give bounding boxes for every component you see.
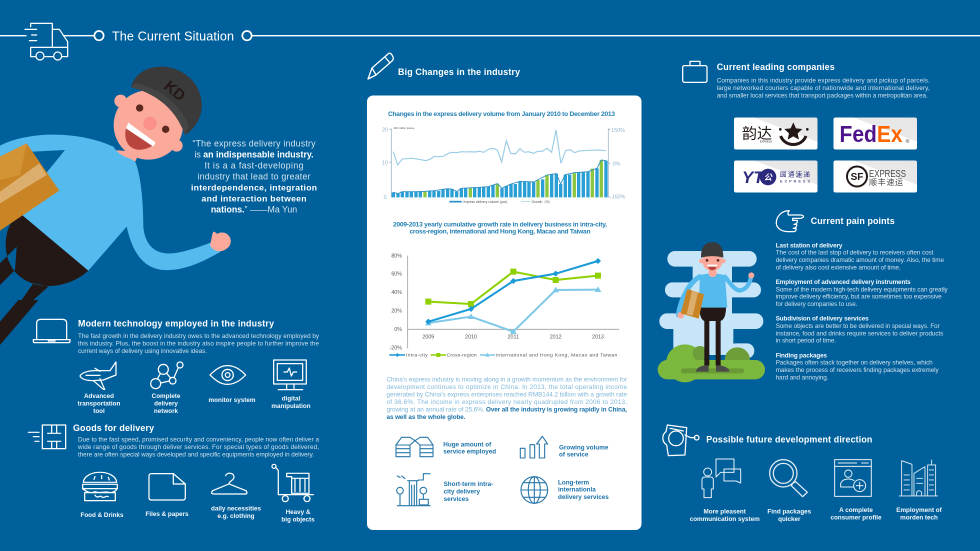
axis labels: 20% [391, 308, 402, 314]
axis labels: 150% [611, 128, 625, 134]
icon: eye [210, 366, 246, 384]
text: modern technology intro: this industry. Plus, the boost in the industry also inspire people to further improve the [78, 340, 319, 348]
icon: burger [83, 472, 117, 501]
label: advanced transportation tool [78, 393, 120, 415]
label: advanced transportation tool: Advanced [84, 393, 114, 400]
text: advanced instruments: Some of the modern high-tech delivery equipments can greatly [776, 286, 949, 293]
label: short-term: Short-term intra- [444, 481, 493, 488]
logo: YTO express: 公 [764, 173, 773, 182]
logo: SF express: SF [851, 172, 863, 183]
axis labels: 60% [391, 272, 402, 278]
label: complete delivery network [152, 393, 181, 415]
chart title [393, 222, 607, 236]
logo: SF express [834, 160, 917, 192]
icon: file [149, 474, 185, 500]
heading: big changes: Big Changes in the industry [398, 67, 520, 77]
label: heavy and big objects [281, 509, 315, 524]
chart title: 2009-2013 yearly cumulative growth rate in delivery business in intra-city, [393, 222, 607, 228]
text: subdivision [776, 316, 943, 345]
legs and trousers [0, 213, 88, 300]
illustration: standing courier [658, 242, 765, 382]
panel: modern technology [33, 318, 320, 415]
hand [210, 232, 231, 251]
chart: yearly cumulative growth rate: 2010 [465, 335, 477, 341]
chart: express delivery volume: express delivery volume (pcs) [463, 200, 507, 204]
axis labels: 0% [613, 162, 621, 168]
panel: future development [663, 425, 943, 523]
text: express industry summary: growing at an annual rate of 25.6%. [386, 406, 485, 413]
parcel [681, 289, 704, 319]
label: digital manipulation [271, 396, 311, 410]
icon: plane [80, 362, 116, 389]
text: finding packages: Packages often stack together on delivery shelves, which [776, 360, 933, 367]
pale blue cloud backdrop [659, 251, 763, 358]
line: international [425, 286, 601, 334]
quote by Ma Yun: is an indispensable industry. [194, 150, 314, 160]
icon: digital monitor [274, 360, 306, 390]
icon: consumer profile window [835, 460, 871, 496]
panel: goods for delivery [28, 423, 319, 524]
label: consumer profile: A complete [839, 507, 873, 514]
text: modern technology intro [78, 333, 320, 355]
text: express industry summary [386, 377, 627, 421]
heading: goods for delivery: Goods for delivery [73, 423, 154, 433]
ground and bushes [666, 344, 704, 382]
cap [131, 67, 202, 135]
hands [748, 272, 754, 278]
label: short-term: city delivery [444, 488, 481, 495]
bars: monthly volume [393, 161, 606, 197]
label: advanced transportation tool: transportation [78, 400, 120, 408]
eyes and cheek [136, 104, 143, 112]
text: advanced instruments: improve delivery efficiency, but are sometimes too expensive [776, 294, 942, 301]
text: companies intro: and smaller local services that transport packages within a metropolitan area. [717, 92, 928, 99]
text: last station: Last station of delivery [776, 242, 843, 249]
panel: white card with charts [367, 96, 642, 530]
heading: the current situation: The Current Situation [112, 30, 234, 44]
text: last station: of delivery also cost extensive amount of time. [776, 264, 901, 271]
label: consumer profile [830, 507, 882, 521]
label: heavy and big objects: big objects [281, 516, 315, 524]
text: companies intro: large networked couriers capable of nationwide and international delivery, [717, 85, 930, 92]
bars: highlighted months [425, 160, 601, 197]
text: goods intro: wide range of goods through deliver services. For special types of goods delivered, [77, 444, 319, 451]
logo: FedEx: FedEx [840, 121, 903, 147]
icon: magnifier [770, 460, 807, 497]
text: last station: delivery companies dramatic amount of money. Also, the time [776, 257, 944, 264]
logo: SF express: EXPRESS [869, 169, 906, 180]
smile [125, 128, 154, 150]
label: growing volume: of service [559, 452, 589, 459]
text: advanced instruments [776, 279, 949, 308]
icon: globe [521, 477, 548, 503]
axes [389, 128, 610, 197]
chart title: Changes in the express delivery volume from January 2010 to December 2013 [388, 111, 615, 118]
label: long-term [558, 479, 609, 501]
label: modern tech: Employment of [896, 507, 943, 514]
text: goods intro: there are often special ways developed and specific equipments employed in delivery. [78, 452, 314, 458]
quote by Ma Yun: industry that lead to greater [198, 172, 311, 182]
chart: express delivery volume: Growth（%） [532, 199, 552, 204]
icon: communication [702, 459, 741, 498]
quote by Ma Yun [191, 138, 317, 214]
text: finding packages: hard and annoying. [776, 375, 829, 382]
legend: international and Hong Kong, Macao and Taiwan [496, 353, 618, 359]
label: consumer profile: consumer profile [830, 514, 882, 521]
legend [389, 353, 618, 359]
parcel [0, 143, 59, 231]
icon: stacked service [396, 437, 433, 457]
axis labels: 100 million pieces [393, 126, 415, 130]
logo: YTO express: 圆通速递 [780, 170, 810, 178]
trousers [699, 307, 726, 321]
neck [111, 150, 138, 169]
text: subdivision: in short period of time. [776, 338, 836, 345]
logo: Yunda express: EXPRESS [760, 140, 772, 144]
legs and shoes [704, 318, 721, 366]
label: daily necessities: daily necessities [211, 506, 262, 512]
chart: yearly cumulative growth rate: 2009 [422, 335, 434, 341]
quote by Ma Yun: interdependence, integration [191, 182, 317, 192]
text: express industry summary: development continues to optimize in China. In 2013, the total operating income [386, 384, 627, 391]
icon: parcel box [28, 425, 66, 449]
text: advanced instruments: Employment of advanced delivery instruments [776, 279, 911, 286]
label: find packages: quicker [778, 516, 801, 523]
text: express industry summary: as well as the whole globe. [386, 414, 466, 421]
icon: hand cart [272, 464, 313, 502]
heading: pain points: Current pain points [811, 216, 895, 226]
illustration: delivery man with parcel [0, 67, 231, 345]
label: heavy and big objects: Heavy & [286, 509, 311, 516]
icon: pencil [368, 53, 393, 79]
label: complete delivery network: Complete [152, 393, 181, 400]
chart: yearly cumulative growth rate [389, 222, 619, 359]
icon: delivery truck with timeline [0, 23, 980, 60]
face [114, 90, 183, 160]
label: communication system: More pleasent [704, 509, 747, 516]
arms and torso [678, 277, 700, 315]
text: goods intro: Due to the fast speed, promised security and conveniency, people now often deliver a [78, 436, 319, 444]
quote by Ma Yun: It is a a fast-developing [204, 160, 304, 170]
text: goods intro [77, 436, 319, 458]
text: subdivision: instance, food and drinks require services to deliver products [776, 330, 943, 337]
icon: laptop [33, 319, 70, 343]
axis labels: 10 [382, 160, 388, 166]
axis labels: 0% [394, 327, 402, 333]
icon: growth bars with arrow [520, 436, 548, 458]
quote by Ma Yun: and interaction between [202, 194, 306, 204]
icon: city delivery [397, 474, 430, 506]
axis labels: 40% [391, 290, 402, 296]
line: intra-city [425, 258, 601, 325]
logo: YTO express [734, 160, 818, 192]
quote by Ma Yun: nations.” ——Ma Yun [211, 204, 297, 214]
chart: yearly cumulative growth rate: 2012 [550, 335, 562, 341]
logo: YTO express: YT [742, 168, 765, 187]
label: communication system: communication system [690, 516, 760, 523]
label: growing volume: Growing volume [559, 444, 609, 451]
legend: Intra-city [406, 353, 428, 359]
icon: camera on hand [663, 425, 699, 456]
text: express industry summary: of 36.6%. The income in express delivery nearly quadrupled from 2006 to 2013, [386, 399, 627, 406]
axis labels: 0 [384, 195, 387, 201]
label: short-term [444, 481, 493, 503]
legend [449, 199, 462, 204]
label: long-term: internationla [558, 487, 596, 494]
icon: network [151, 362, 183, 389]
icon: hanger [212, 473, 247, 494]
text: finding packages: Finding packages [776, 352, 827, 359]
label: advanced transportation tool: tool [93, 408, 105, 415]
panel: big changes heading [368, 53, 520, 79]
label: huge amount: service employed [443, 449, 496, 456]
chart: express delivery volume [382, 111, 626, 204]
head [709, 269, 717, 277]
label: digital manipulation: digital [282, 396, 301, 402]
logo: Yunda express: 韵达 [742, 126, 772, 142]
chart: yearly cumulative growth rate: 2011 [508, 335, 519, 341]
logo: FedEx [834, 118, 917, 150]
header: the current situation [0, 23, 980, 60]
heading: future development: Possible future development direction [706, 435, 872, 445]
label: files and papers: Files & papers [145, 511, 189, 518]
label: modern tech: morden tech [900, 514, 938, 521]
label: food and drinks: Food & Drinks [80, 512, 124, 519]
panel: current leading companies [683, 61, 930, 192]
text: express industry summary: China's express industry is moving along in a growth momentum as the environment for [386, 377, 627, 384]
chart: yearly cumulative growth rate: 2013 [592, 335, 604, 341]
text: express industry summary: Over all the industry is growing rapidly in China, [486, 406, 627, 413]
text: express industry summary: generated by China's express enterprises reached RMB144.2 billion with a growth rate [386, 392, 627, 399]
text: finding packages [776, 352, 940, 382]
text: modern technology intro: The fast growth in the delivery industry owes to the advanced technology employed by [78, 333, 320, 340]
axes [408, 256, 619, 348]
panel: service facts [396, 436, 609, 506]
label: growing volume [559, 444, 609, 459]
label: complete delivery network: delivery [154, 400, 178, 408]
label: daily necessities [211, 506, 262, 520]
text: finding packages: makes the process of receivers finding packages extremely [776, 367, 940, 374]
label: huge amount: Huge amount of [443, 441, 492, 448]
icon: pointing hand [776, 211, 803, 232]
axis labels: -150% [610, 195, 626, 201]
blue jumper [0, 135, 221, 271]
label: find packages: Find packages [767, 509, 812, 516]
label: digital manipulation: manipulation [271, 403, 311, 410]
logo: YTO express: EXPRESS [780, 180, 810, 184]
quote by Ma Yun: “The express delivery industry [192, 138, 316, 148]
label: communication system [690, 509, 760, 523]
icon: briefcase [683, 61, 707, 82]
text: last station [776, 242, 944, 271]
panel: current pain points [658, 211, 949, 382]
volume trend outline [393, 160, 606, 194]
label: long-term: delivery services [558, 494, 609, 501]
chart title: cross-region, international and Hong Kong, Macao and Taiwan [410, 228, 590, 236]
label: daily necessities: e.g. clothing [217, 513, 255, 520]
line: growth [393, 130, 606, 165]
label: complete delivery network: network [154, 408, 179, 415]
heading: leading companies: Current leading companies [717, 62, 835, 72]
logo: SF express: 顺丰速运 [869, 177, 903, 187]
heading: modern technology: Modern technology employed in the industry [78, 318, 274, 328]
label: monitor system: monitor system [209, 397, 256, 404]
line: cross-region [425, 269, 601, 307]
axis labels [390, 253, 402, 352]
text: last station: The cost of the last stop of delivery to receivers often cost [776, 250, 934, 257]
text: companies intro [717, 78, 930, 99]
icon: city buildings [899, 460, 938, 496]
label: modern tech [896, 507, 943, 521]
label: huge amount [443, 441, 496, 456]
axis labels: 80% [391, 253, 402, 259]
axis labels: -20% [390, 346, 402, 352]
legend: Cross-region [447, 353, 477, 359]
text: subdivision: Some objects are better to be delivered in special ways. For [776, 323, 940, 330]
axis labels: 20 [382, 128, 388, 134]
text: subdivision: Subdivision of delivery services [776, 316, 869, 323]
axis labels [382, 126, 626, 201]
logo: Yunda express [734, 118, 818, 150]
text: companies intro: Companies in this industry provide express delivery and pickup of parcels. [717, 78, 930, 85]
text: advanced instruments: for delivery companies to use. [776, 301, 858, 308]
cap lettering: KD [161, 78, 188, 105]
text: modern technology intro: current ways of delivery using innovative ideas. [78, 348, 207, 355]
label: long-term: Long-term [558, 479, 590, 486]
label: find packages [767, 509, 812, 523]
label: short-term: services [444, 496, 469, 503]
ears [114, 95, 127, 107]
